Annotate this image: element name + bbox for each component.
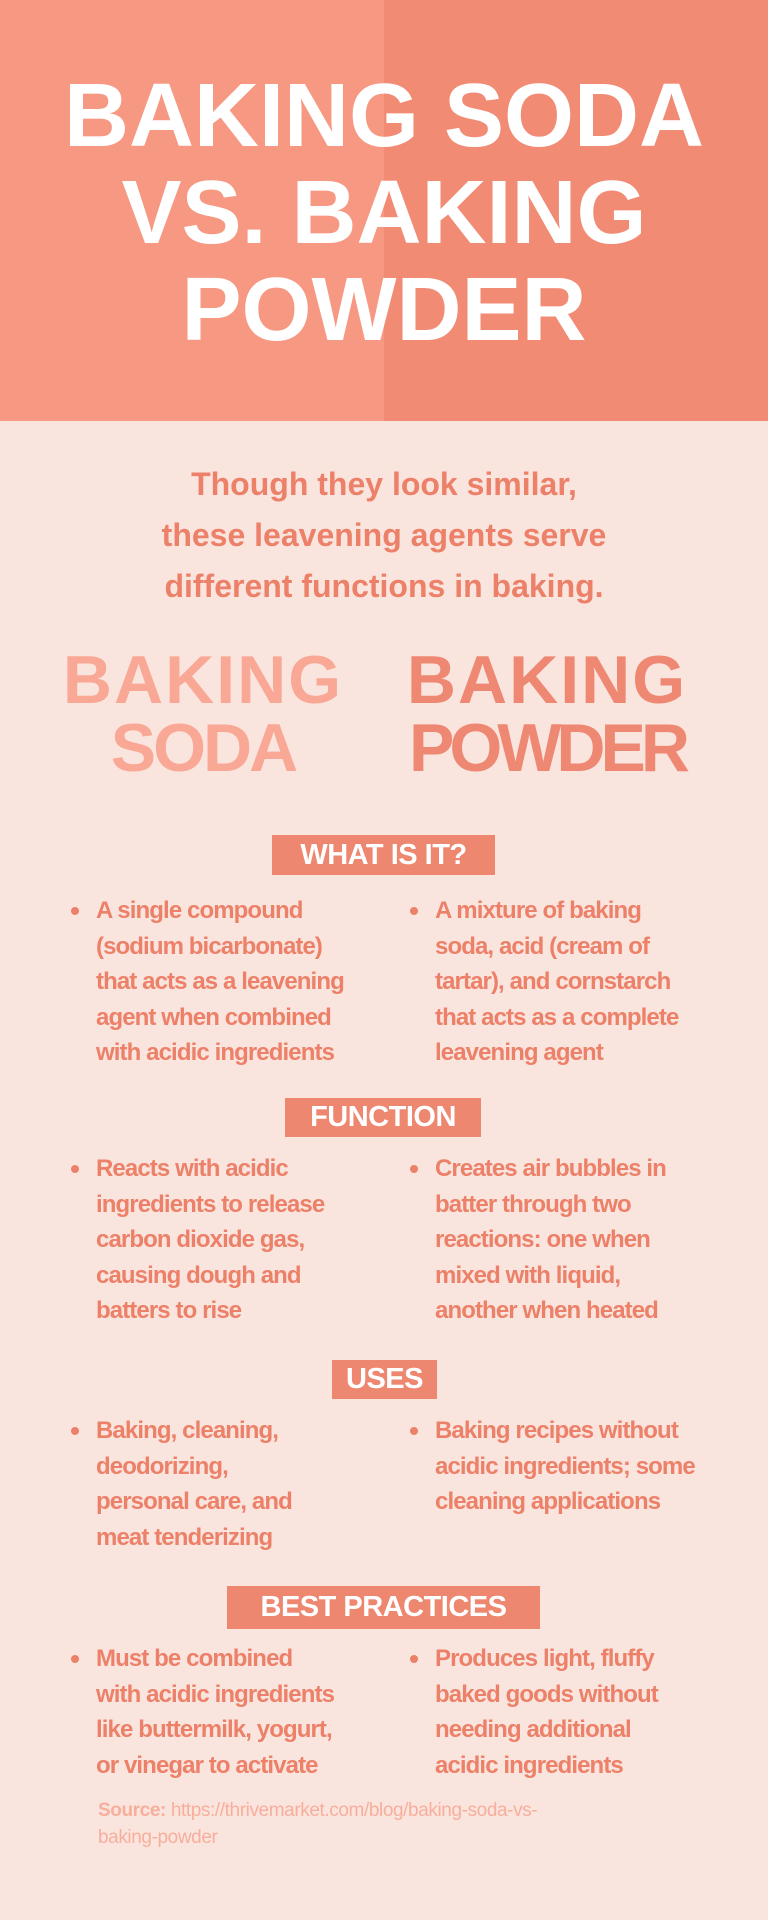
bullet: soda what: A single compound <box>96 897 302 924</box>
column heading: baking powder <box>407 642 688 786</box>
title: BAKING SODA <box>64 66 704 166</box>
bullet: soda best <box>71 1641 401 1783</box>
bullet: powder uses: Baking recipes without <box>435 1417 678 1444</box>
column heading: baking powder: POWDER <box>409 710 685 786</box>
source: baking-powder <box>98 1827 217 1848</box>
bullet: soda uses: personal care, and <box>96 1488 292 1515</box>
title: POWDER <box>182 260 586 360</box>
bullet: soda uses: Baking, cleaning, <box>96 1417 278 1444</box>
bullet: powder what: A mixture of baking <box>435 897 641 924</box>
bullet: powder uses: acidic ingredients; some <box>435 1452 695 1480</box>
section header: best practices: BEST PRACTICES <box>260 1591 506 1623</box>
bullet: soda best: Must be combined <box>96 1645 292 1672</box>
subtitle: these leavening agents serve <box>162 517 606 553</box>
bullet: soda function: carbon dioxide gas, <box>96 1226 304 1253</box>
title <box>64 66 704 360</box>
bullet: powder function: Creates air bubbles in <box>435 1155 666 1182</box>
bullet: powder what: soda, acid (cream of <box>435 932 649 960</box>
section header: uses <box>332 1360 437 1399</box>
bullet: soda function <box>71 1151 401 1328</box>
bullet: powder function: another when heated <box>435 1297 658 1324</box>
bullet: powder best: Produces light, fluffy <box>435 1645 654 1672</box>
subtitle: Though they look similar, <box>191 466 577 502</box>
title: VS. BAKING <box>121 163 647 263</box>
bullet: powder best <box>410 1641 740 1783</box>
bullet: soda best: like buttermilk, yogurt, <box>96 1716 332 1743</box>
section header: uses: USES <box>346 1363 423 1395</box>
bullet: soda what: agent when combined <box>96 1004 331 1030</box>
bullet: powder best: baked goods without <box>435 1680 658 1708</box>
section header: best practices <box>227 1586 540 1629</box>
bullet: soda uses <box>71 1413 401 1555</box>
column heading: baking soda: BAKING <box>63 642 343 718</box>
bullet: powder uses <box>410 1413 740 1520</box>
bullet: powder what <box>410 893 740 1070</box>
header band <box>0 0 768 421</box>
bullet: soda what <box>71 893 401 1070</box>
subtitle: different functions in baking. <box>164 568 604 604</box>
subtitle <box>162 466 606 604</box>
bullet: soda what: with acidic ingredients <box>96 1039 334 1066</box>
bullet: powder what: leavening agent <box>435 1039 603 1066</box>
bullet: powder function: mixed with liquid, <box>435 1262 620 1288</box>
bullet: powder function: batter through two <box>435 1190 631 1218</box>
bullet: soda what: that acts as a leavening <box>96 968 344 995</box>
column heading: baking soda <box>63 642 343 786</box>
bullet: soda what: (sodium bicarbonate) <box>96 932 322 960</box>
section header: function: FUNCTION <box>310 1101 456 1133</box>
bullet: powder uses: cleaning applications <box>435 1488 660 1515</box>
source <box>98 1800 537 1848</box>
bullet: powder function <box>410 1151 740 1328</box>
bullet: soda best: or vinegar to activate <box>96 1752 318 1778</box>
bullet: soda uses: deodorizing, <box>96 1452 228 1480</box>
bullet: soda function: ingredients to release <box>96 1190 324 1218</box>
bullet: powder what: that acts as a complete <box>435 1004 678 1030</box>
bullet: soda function: causing dough and <box>96 1262 301 1288</box>
bullet: soda uses: meat tenderizing <box>96 1524 272 1550</box>
source: Source: https://thrivemarket.com/blog/baking-soda-vs- <box>98 1800 537 1821</box>
section header: what is it: WHAT IS IT? <box>300 839 467 871</box>
bullet: soda function: Reacts with acidic <box>96 1155 288 1182</box>
section header: function <box>285 1098 481 1137</box>
bullet: soda best: with acidic ingredients <box>96 1680 334 1708</box>
column heading: baking powder: BAKING <box>407 642 687 718</box>
bullet: powder best: needing additional <box>435 1716 631 1743</box>
column heading: baking soda: SODA <box>111 710 295 786</box>
bullet: powder best: acidic ingredients <box>435 1752 623 1778</box>
bullet: powder what: tartar), and cornstarch <box>435 968 670 995</box>
bullet: soda function: batters to rise <box>96 1297 241 1324</box>
bullet: powder function: reactions: one when <box>435 1226 650 1253</box>
section header: what is it <box>272 835 495 875</box>
